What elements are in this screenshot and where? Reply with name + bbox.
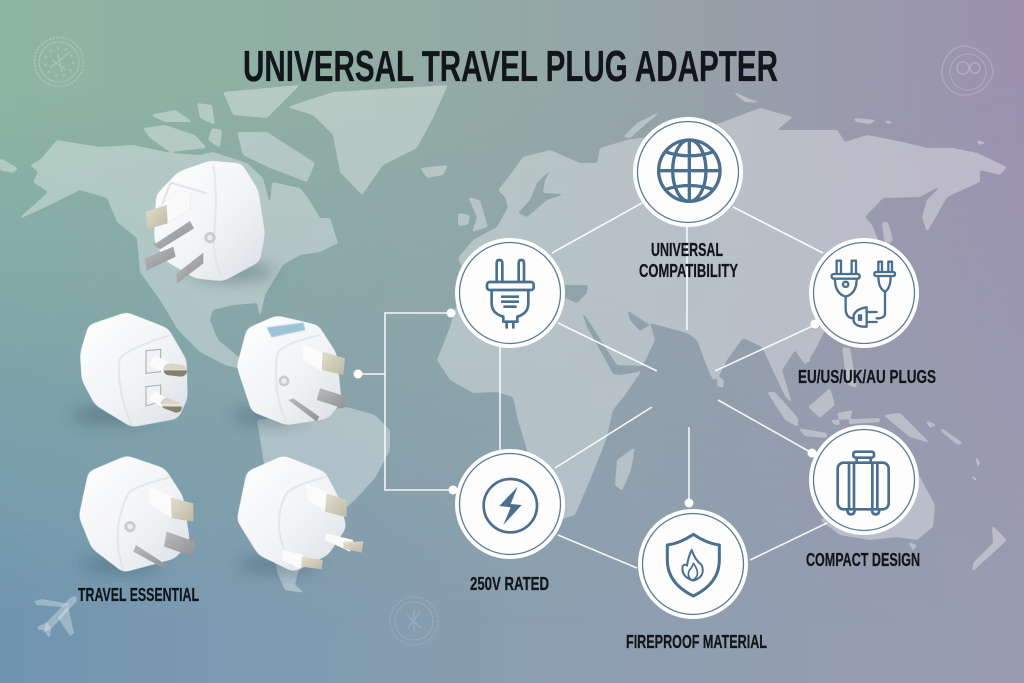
node: universal compatibility bbox=[633, 117, 743, 227]
North America bbox=[17, 140, 338, 372]
node: plug bbox=[455, 238, 565, 348]
title: UNIVERSAL TRAVEL PLUG ADAPTER bbox=[243, 42, 778, 91]
label: 250V rated: 250V RATED bbox=[470, 574, 549, 594]
watermark seal: top left bbox=[34, 38, 84, 86]
Arctic islands bbox=[143, 85, 315, 182]
South America bbox=[257, 407, 390, 593]
label: travel essential: TRAVEL ESSENTIAL bbox=[78, 585, 199, 605]
icon: shield with flame bbox=[667, 534, 719, 596]
label: universal compatibility bbox=[639, 240, 738, 281]
connector lines bbox=[358, 203, 827, 568]
watermark seal: top right bbox=[942, 46, 993, 95]
adapter: US two-pin bbox=[70, 312, 188, 427]
Arctic Asia islands bbox=[623, 90, 987, 145]
adapter: top three-pin bbox=[145, 161, 275, 284]
British Isles bbox=[458, 197, 488, 232]
icon: globe bbox=[659, 140, 720, 201]
label: universal compatibility: COMPATIBILITY bbox=[639, 261, 738, 281]
label: universal compatibility: UNIVERSAL bbox=[651, 240, 723, 260]
Pacific islands bbox=[968, 455, 980, 481]
label: compact design: COMPACT DESIGN bbox=[806, 550, 920, 570]
icon: suitcase bbox=[838, 452, 889, 514]
adapter: UK three-pin bbox=[237, 455, 363, 572]
Sri Lanka bbox=[717, 376, 724, 388]
icon: plug set with cables bbox=[832, 261, 895, 327]
label: fireproof material: FIREPROOF MATERIAL bbox=[626, 632, 767, 652]
Australia bbox=[820, 460, 935, 551]
icon: airplane bbox=[35, 596, 77, 637]
Greenland bbox=[287, 85, 448, 195]
Afro-Eurasia bbox=[437, 108, 1007, 520]
adapter: AU angled with label bbox=[230, 315, 347, 425]
adapter: AU three-pin bbox=[79, 455, 195, 573]
Madagascar bbox=[615, 447, 635, 491]
node: 250V rated bbox=[455, 449, 565, 559]
watermark seal: bottom centre bbox=[390, 597, 438, 645]
New Zealand bbox=[972, 525, 1007, 572]
node: EU/US/UK/AU plugs bbox=[809, 238, 919, 348]
node: fireproof material bbox=[638, 509, 748, 619]
Alaska island bbox=[0, 158, 18, 173]
icon: plug bbox=[487, 260, 534, 329]
connector dots bbox=[354, 308, 820, 508]
Iceland bbox=[420, 165, 448, 178]
Japan and Sakhalin bbox=[862, 222, 898, 296]
label: plugs: EU/US/UK/AU PLUGS bbox=[798, 367, 936, 387]
icon: lightning bolt bbox=[484, 479, 537, 532]
world map background bbox=[0, 85, 1007, 593]
Indonesia and Philippines bbox=[767, 340, 963, 445]
node: compact design bbox=[809, 425, 919, 535]
